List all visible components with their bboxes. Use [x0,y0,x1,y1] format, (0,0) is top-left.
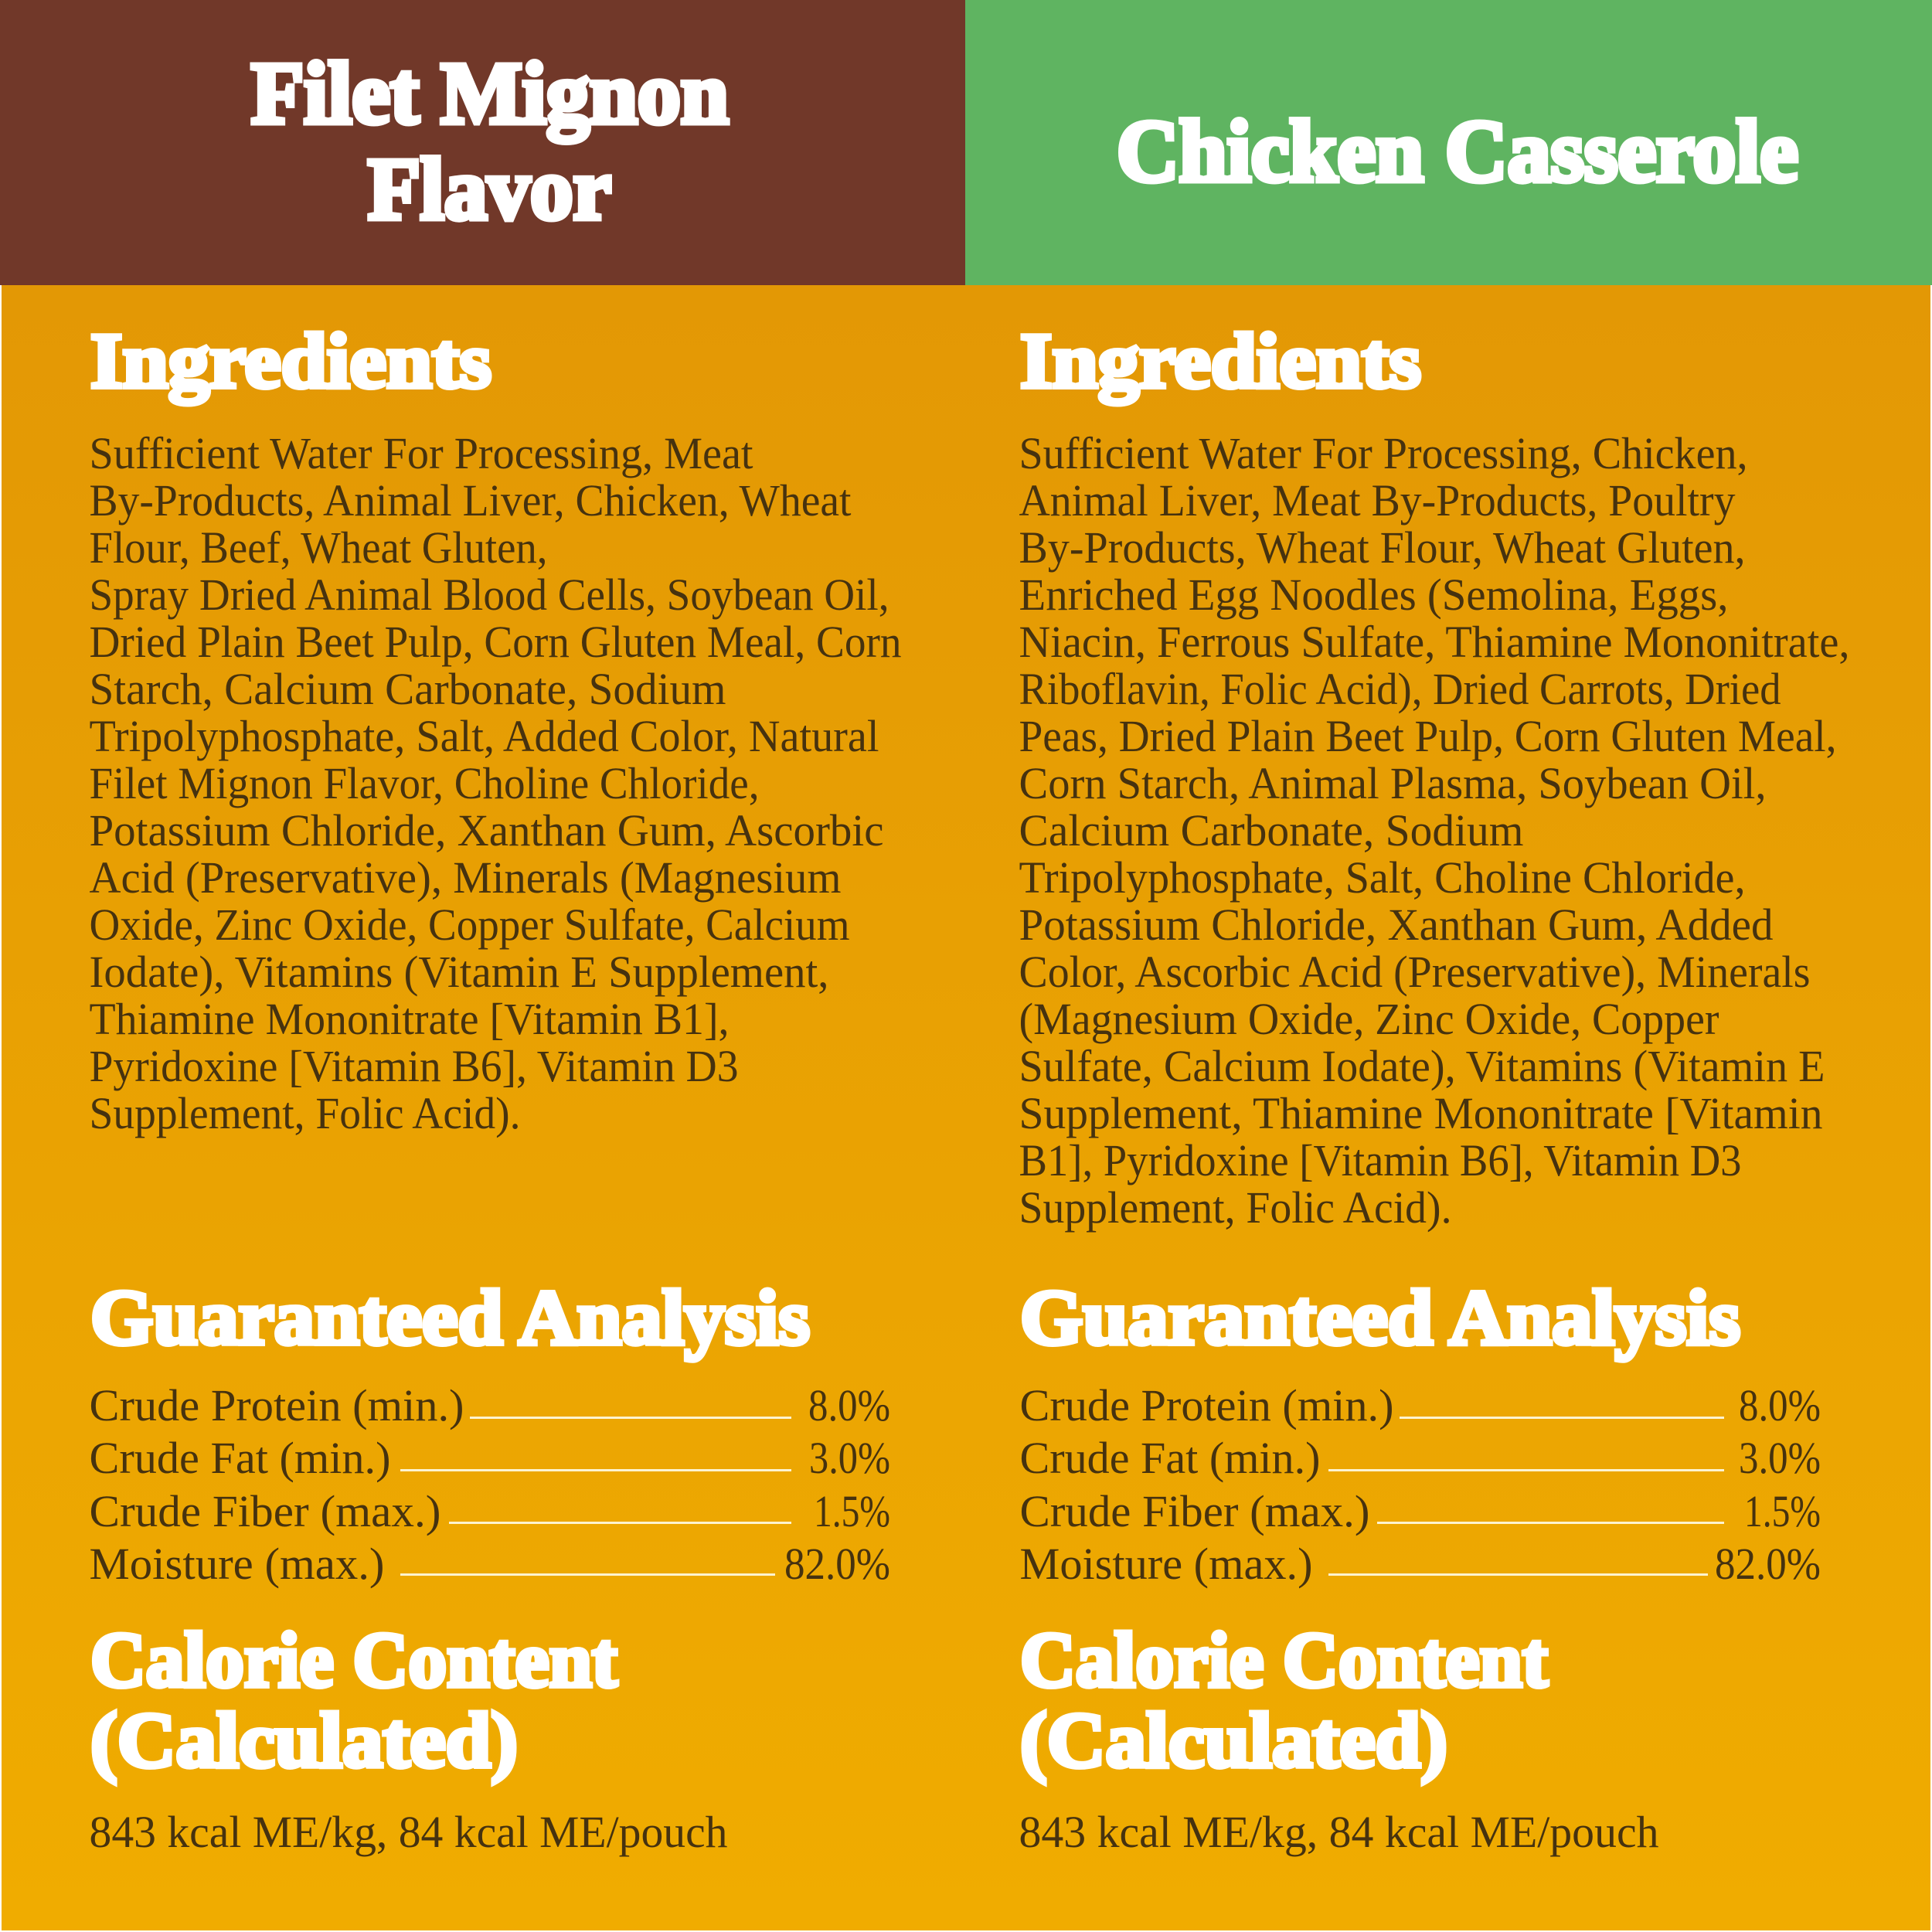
header: Filet Mignon Flavor [0,0,965,285]
heading: Ingredients right: Ingredients [1020,318,1421,405]
text block: ingredients left: Acid (Preservative), Minerals (Magnesium [90,852,841,903]
text block: ingredients left: Tripolyphosphate, Salt, Added Color, Natural [90,711,879,761]
text: calorie values left: 843 kcal ME/kg, 84 kcal ME/pouch [90,1807,728,1857]
text block: ingredients left: Supplement, Folic Acid). [90,1088,521,1138]
text block: ingredients left: Iodate), Vitamins (Vitamin E Supplement, [90,947,828,997]
table: guaranteed analysis right [1020,1380,1821,1589]
header: Chicken Casserole [965,0,1932,285]
table: guaranteed analysis left: Moisture (max.) [90,1539,385,1589]
text block: ingredients right: Corn Starch, Animal Plasma, Soybean Oil, [1019,758,1767,808]
text block: ingredients right: Enriched Egg Noodles (Semolina, Eggs, [1019,570,1728,620]
text block: ingredients left: Sufficient Water For Processing, Meat [90,428,753,478]
heading: Guaranteed Analysis right: Guaranteed Analysis [1020,1274,1740,1362]
text block: ingredients left: By-Products, Animal Liver, Chicken, Wheat [90,475,852,526]
text block: ingredients left: Potassium Chloride, Xanthan Gum, Ascorbic [90,805,884,855]
text block: ingredients left: Dried Plain Beet Pulp, Corn Gluten Meal, Corn [90,617,901,667]
text block: ingredients left: Starch, Calcium Carbonate, Sodium [90,664,726,714]
text block: ingredients right: Animal Liver, Meat By-Products, Poultry [1019,475,1736,526]
table: guaranteed analysis left [90,1380,890,1589]
heading: Calorie Content left [90,1617,617,1784]
text block: ingredients right: B1], Pyridoxine [Vitamin B6], Vitamin D3 [1019,1135,1742,1185]
table: guaranteed analysis left: Crude Protein (min.) [90,1380,464,1430]
table: guaranteed analysis right: Moisture (max.) [1020,1539,1312,1589]
text block: ingredients left: Filet Mignon Flavor, Choline Chloride, [90,758,759,808]
heading: Ingredients left: Ingredients [90,318,492,405]
table: guaranteed analysis right: Crude Fat (min.) [1020,1433,1320,1483]
text block: ingredients right: By-Products, Wheat Flour, Wheat Gluten, [1019,522,1745,573]
heading: Calorie Content left: Calorie Content [90,1617,617,1704]
text block: ingredients right: Potassium Chloride, Xanthan Gum, Added [1019,900,1773,950]
text block: ingredients right: Tripolyphosphate, Salt, Choline Chloride, [1019,852,1745,903]
table: guaranteed analysis left: 8.0% [808,1380,890,1430]
header: Filet Mignon Flavor: Filet Mignon [251,44,729,142]
text block: ingredients left [90,428,901,1138]
text block: ingredients left: Spray Dried Animal Blood Cells, Soybean Oil, [90,570,889,620]
text block: ingredients right: Color, Ascorbic Acid (Preservative), Minerals [1019,947,1810,997]
text block: ingredients right: Peas, Dried Plain Beet Pulp, Corn Gluten Meal, [1019,711,1836,761]
heading: Calorie Content right: (Calculated) [1020,1697,1447,1784]
text: calorie values right: 843 kcal ME/kg, 84 kcal ME/pouch [1019,1807,1658,1857]
table: guaranteed analysis left: 82.0% [784,1539,890,1589]
table: guaranteed analysis right: 3.0% [1739,1433,1821,1483]
heading: Guaranteed Analysis left: Guaranteed Analysis [90,1274,810,1362]
table: guaranteed analysis right: 1.5% [1744,1486,1821,1536]
text block: ingredients right: Riboflavin, Folic Acid), Dried Carrots, Dried [1019,664,1781,714]
header: Chicken Casserole: Chicken Casserole [1117,102,1798,200]
table: guaranteed analysis right: 82.0% [1715,1539,1821,1589]
table: guaranteed analysis left: 3.0% [809,1433,890,1483]
text block: ingredients right: (Magnesium Oxide, Zinc Oxide, Copper [1019,994,1719,1044]
header: Filet Mignon Flavor: Flavor [368,140,611,238]
table: guaranteed analysis left: Crude Fat (min.) [90,1433,391,1483]
text block: ingredients left: Thiamine Mononitrate [Vitamin B1], [90,994,730,1044]
table: guaranteed analysis right: Crude Protein (min.) [1020,1380,1394,1430]
text block: ingredients right: Sufficient Water For Processing, Chicken, [1019,428,1748,478]
table: guaranteed analysis right: 8.0% [1739,1380,1821,1430]
text block: ingredients right: Supplement, Thiamine Mononitrate [Vitamin [1019,1088,1822,1138]
text block: ingredients left: Flour, Beef, Wheat Gluten, [90,522,547,573]
heading: Calorie Content right [1020,1617,1548,1784]
heading: Calorie Content right: Calorie Content [1020,1617,1548,1704]
table: guaranteed analysis right: Crude Fiber (max.) [1020,1486,1369,1536]
text block: ingredients right: Calcium Carbonate, Sodium [1019,805,1524,855]
text block: ingredients left: Oxide, Zinc Oxide, Copper Sulfate, Calcium [90,900,850,950]
text block: ingredients right [1019,428,1850,1233]
table: guaranteed analysis left: Crude Fiber (max.) [90,1486,440,1536]
text block: ingredients right: Niacin, Ferrous Sulfate, Thiamine Mononitrate, [1019,617,1850,667]
text block: ingredients right: Sulfate, Calcium Iodate), Vitamins (Vitamin E [1019,1041,1825,1091]
table: guaranteed analysis left: 1.5% [814,1486,890,1536]
heading: Calorie Content left: (Calculated) [90,1697,518,1784]
text block: ingredients left: Pyridoxine [Vitamin B6], Vitamin D3 [90,1041,739,1091]
text block: ingredients right: Supplement, Folic Acid). [1019,1182,1451,1233]
